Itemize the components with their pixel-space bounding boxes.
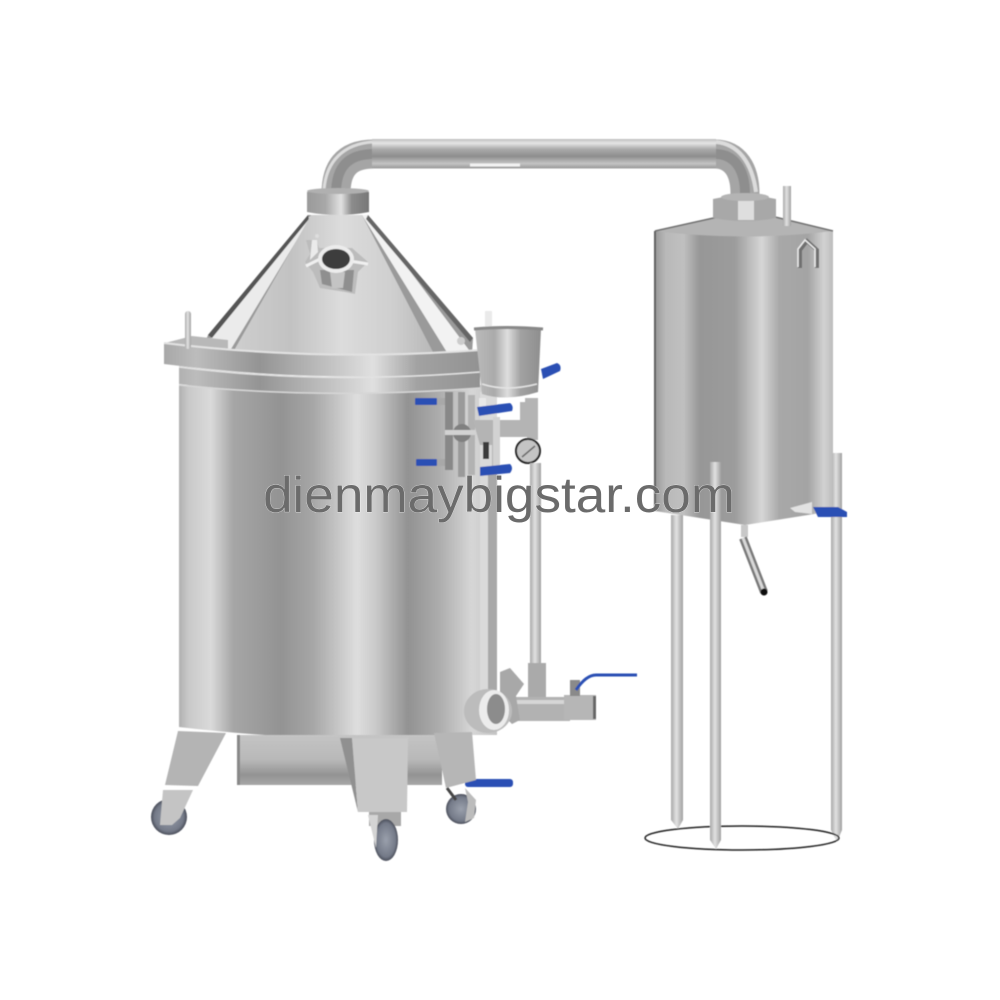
left caster leg [151,731,226,835]
condenser tank [655,217,833,525]
firebox under boiler [237,735,442,785]
centre stand leg [710,462,721,849]
cone lid [198,215,473,354]
pressure gauge [516,439,540,463]
stand ring [645,826,839,850]
condenser blue valve [790,502,847,517]
blue valve handles [415,363,561,787]
lid rim and flange [164,311,482,393]
condenser stand legs [671,453,842,842]
cone top collar [307,188,369,215]
right caster leg [434,732,476,824]
condensate outlet spout [741,525,768,596]
inspection port on cone [305,234,368,294]
pipework and valves beside boiler [416,392,538,477]
drain fitting and ball valve [464,663,637,733]
watermark: dienmaybigstar.com [263,467,735,523]
distiller artwork [151,139,847,861]
hose [530,463,541,665]
steam pipe [324,139,756,194]
boiler body [179,385,497,739]
front caster leg [340,738,408,861]
condenser top collar and vent tube [713,186,791,226]
funnel cup [474,311,543,398]
